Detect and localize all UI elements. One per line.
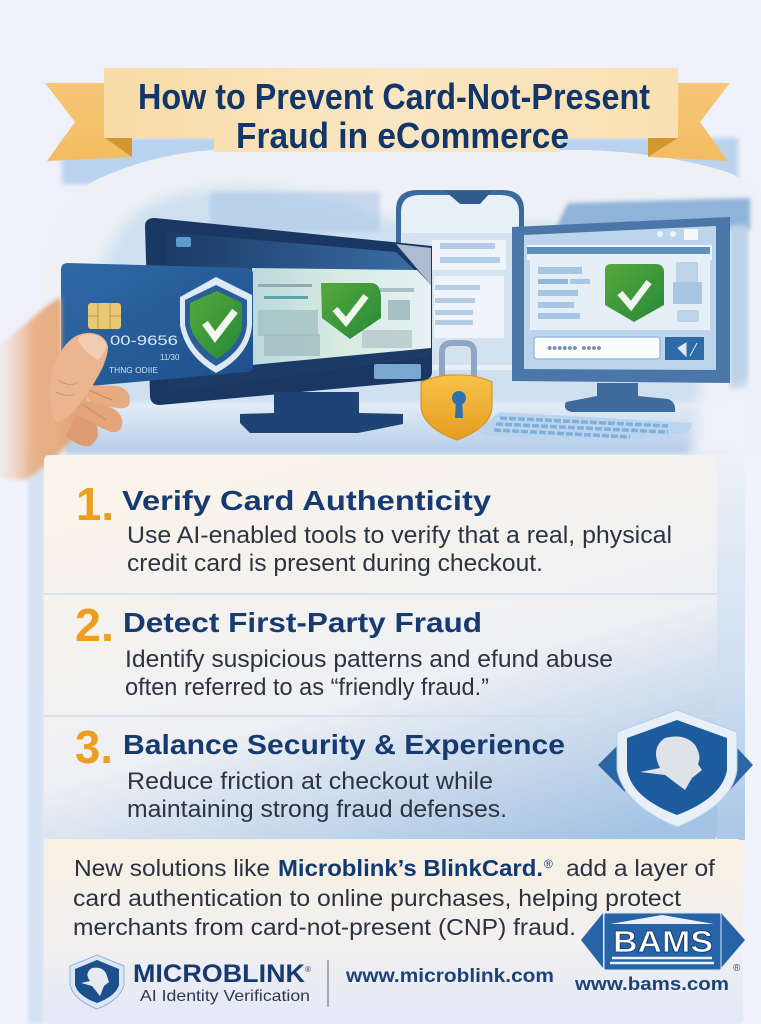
ribbon body [104, 68, 678, 152]
closing text: add a layer of [566, 855, 716, 881]
desk surface [65, 402, 735, 454]
step 2 [75, 599, 613, 701]
sky backdrop [42, 138, 761, 455]
Microblink logo: ® [305, 965, 311, 974]
Microblink logo [70, 955, 311, 1009]
step 1: Verify Card Authenticity [122, 485, 491, 516]
BAMS logo: BAMS [613, 924, 713, 959]
closing text: ® [544, 857, 553, 871]
card number: 00-9656 [110, 332, 178, 348]
ribbon tails [45, 83, 730, 161]
left side strip [28, 455, 44, 1024]
icon: blue shield badge [598, 710, 753, 827]
step 2: Identify suspicious patterns and efund abuse [125, 646, 613, 673]
BAMS logo [581, 913, 745, 974]
credit card: 11/30 [160, 353, 180, 362]
Microblink logo: MICROBLINK [133, 960, 305, 988]
BAMS URL: www.bams.com [574, 974, 729, 994]
closing text: merchants from card-not-present (CNP) fraud. [73, 914, 576, 940]
BAMS logo: ® [733, 963, 741, 974]
step 2: 2. [75, 599, 114, 651]
closing text: card authentication to online purchases, helping protect [73, 885, 682, 911]
panel: closing note [44, 839, 745, 1024]
card chip [88, 303, 121, 329]
icon: green check shield on card [180, 277, 252, 373]
padlock [421, 343, 492, 440]
right side strip [717, 455, 745, 840]
scene illustration [0, 138, 761, 480]
title ribbon: Fraud in eCommerce [236, 115, 569, 156]
monitor stand [240, 392, 403, 433]
step 1: credit card is present during checkout. [127, 550, 543, 577]
left monitor [145, 218, 432, 433]
step 3: 3. [75, 721, 113, 773]
closing text [73, 855, 716, 940]
phone [396, 190, 524, 370]
keyboard [479, 412, 692, 445]
password field: •••••• •••• [547, 340, 601, 357]
credit card [61, 263, 253, 388]
glass screen panel [252, 268, 431, 365]
hand holding card [0, 297, 130, 480]
password field [534, 337, 704, 360]
step 2: Detect First-Party Fraud [123, 607, 482, 638]
monitor stand [565, 383, 675, 412]
icon: green check shield on monitor [321, 283, 381, 339]
step 3: maintaining strong fraud defenses. [127, 796, 507, 823]
closing text: New solutions like [74, 855, 270, 881]
closing text: Microblink’s BlinkCard. [278, 855, 543, 881]
step 3: Balance Security & Experience [123, 729, 565, 760]
step 3 [75, 721, 565, 823]
icon: green check shield [605, 264, 664, 322]
panel: steps [44, 455, 717, 840]
step 2: often referred to as “friendly fraud.” [125, 674, 489, 701]
step 1: 1. [76, 478, 114, 530]
title: How to Prevent Card-Not-Present [138, 76, 650, 117]
Microblink logo: AI Identity Verification [140, 988, 310, 1005]
right monitor [512, 217, 730, 412]
Microblink URL: www.microblink.com [345, 966, 554, 987]
step 1: Use AI-enabled tools to verify that a real, physical [127, 522, 672, 549]
title ribbon [45, 68, 730, 161]
credit card: THNG ODIIE [109, 366, 158, 375]
step 3: Reduce friction at checkout while [127, 768, 493, 795]
step 1 [76, 478, 672, 577]
